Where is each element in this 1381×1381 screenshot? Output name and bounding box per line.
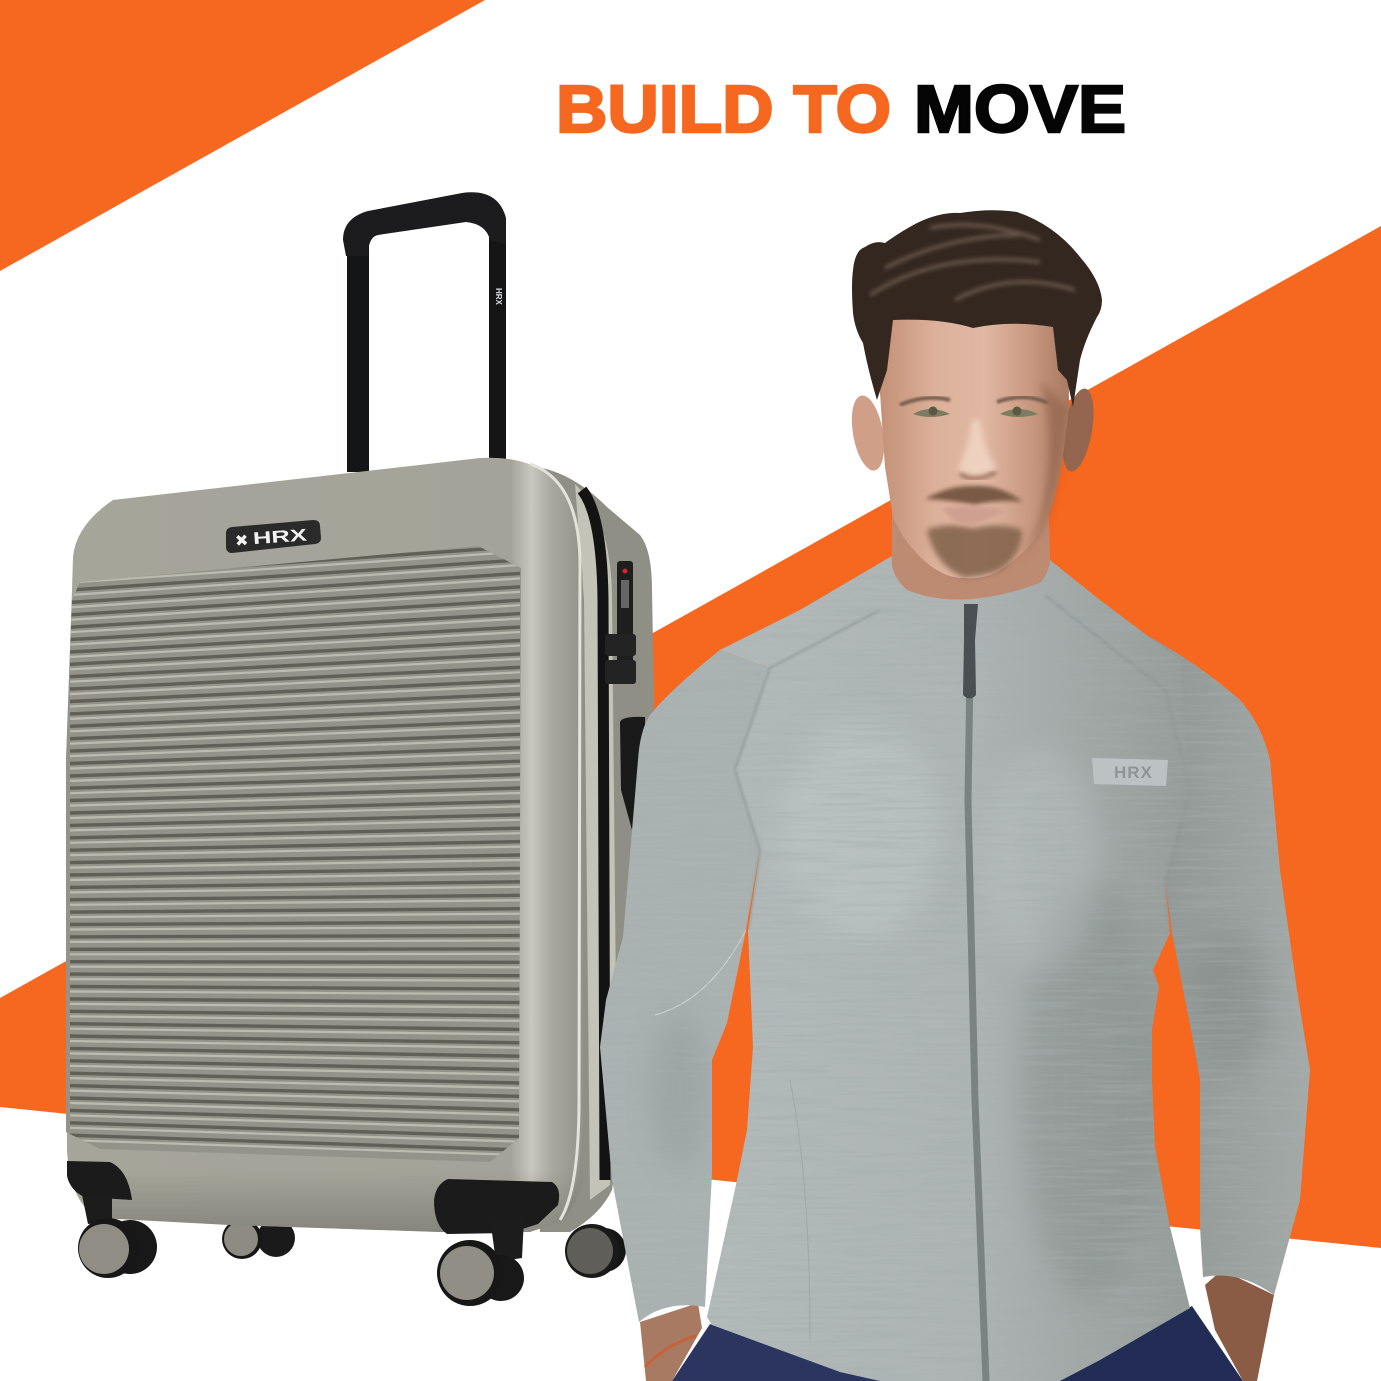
left eye and brow xyxy=(900,398,950,417)
neck xyxy=(892,490,1050,602)
side trim strip xyxy=(575,484,616,1200)
face shading xyxy=(1020,380,1067,560)
front shell xyxy=(66,458,583,1232)
zipper xyxy=(968,606,986,1381)
front right wheel xyxy=(437,1218,524,1306)
face xyxy=(880,298,1069,578)
background: diagonal orange band xyxy=(0,226,1381,1248)
HRX badge: HRX xyxy=(252,525,309,548)
bracelet xyxy=(645,1336,696,1367)
right corner bumper xyxy=(434,1179,559,1234)
right eye and brow xyxy=(997,397,1048,417)
front left wheel xyxy=(78,1195,157,1278)
hands xyxy=(640,1270,1274,1381)
right sleeve xyxy=(1150,637,1310,1295)
rear wheels xyxy=(222,1219,626,1278)
goatee xyxy=(927,525,1022,577)
suitcase xyxy=(60,192,654,1306)
lips xyxy=(943,506,1005,525)
zipper and side handle xyxy=(582,490,645,1180)
jacket xyxy=(590,550,1320,1381)
torso xyxy=(707,556,1190,1381)
hair xyxy=(852,210,1102,407)
combination lock xyxy=(605,561,636,684)
person xyxy=(590,210,1320,1381)
title xyxy=(556,72,1126,147)
chest logo xyxy=(1092,758,1168,786)
jacket shading xyxy=(590,550,1320,1381)
ears xyxy=(847,386,1099,474)
front edge highlight xyxy=(530,464,580,1220)
chest logo: HRX xyxy=(1114,763,1153,782)
HRX badge: ✖ xyxy=(235,532,249,550)
background: top-left orange triangle xyxy=(0,0,485,271)
nose xyxy=(958,420,996,479)
title: orange words: BUILD TO xyxy=(556,72,891,147)
title: black word: MOVE xyxy=(914,72,1126,147)
moustache xyxy=(925,486,1023,505)
shell lower shading xyxy=(84,1170,583,1232)
left sleeve xyxy=(600,650,770,1322)
telescopic handle xyxy=(343,192,506,472)
left corner bumper xyxy=(67,1161,132,1200)
hair highlights xyxy=(870,225,1075,300)
ribbed panel xyxy=(60,540,530,1170)
zipper pull xyxy=(963,604,978,698)
trousers xyxy=(672,1306,1243,1381)
side shell xyxy=(530,466,654,1232)
telescopic handle: HRX xyxy=(494,288,503,306)
HRX badge xyxy=(226,520,321,553)
